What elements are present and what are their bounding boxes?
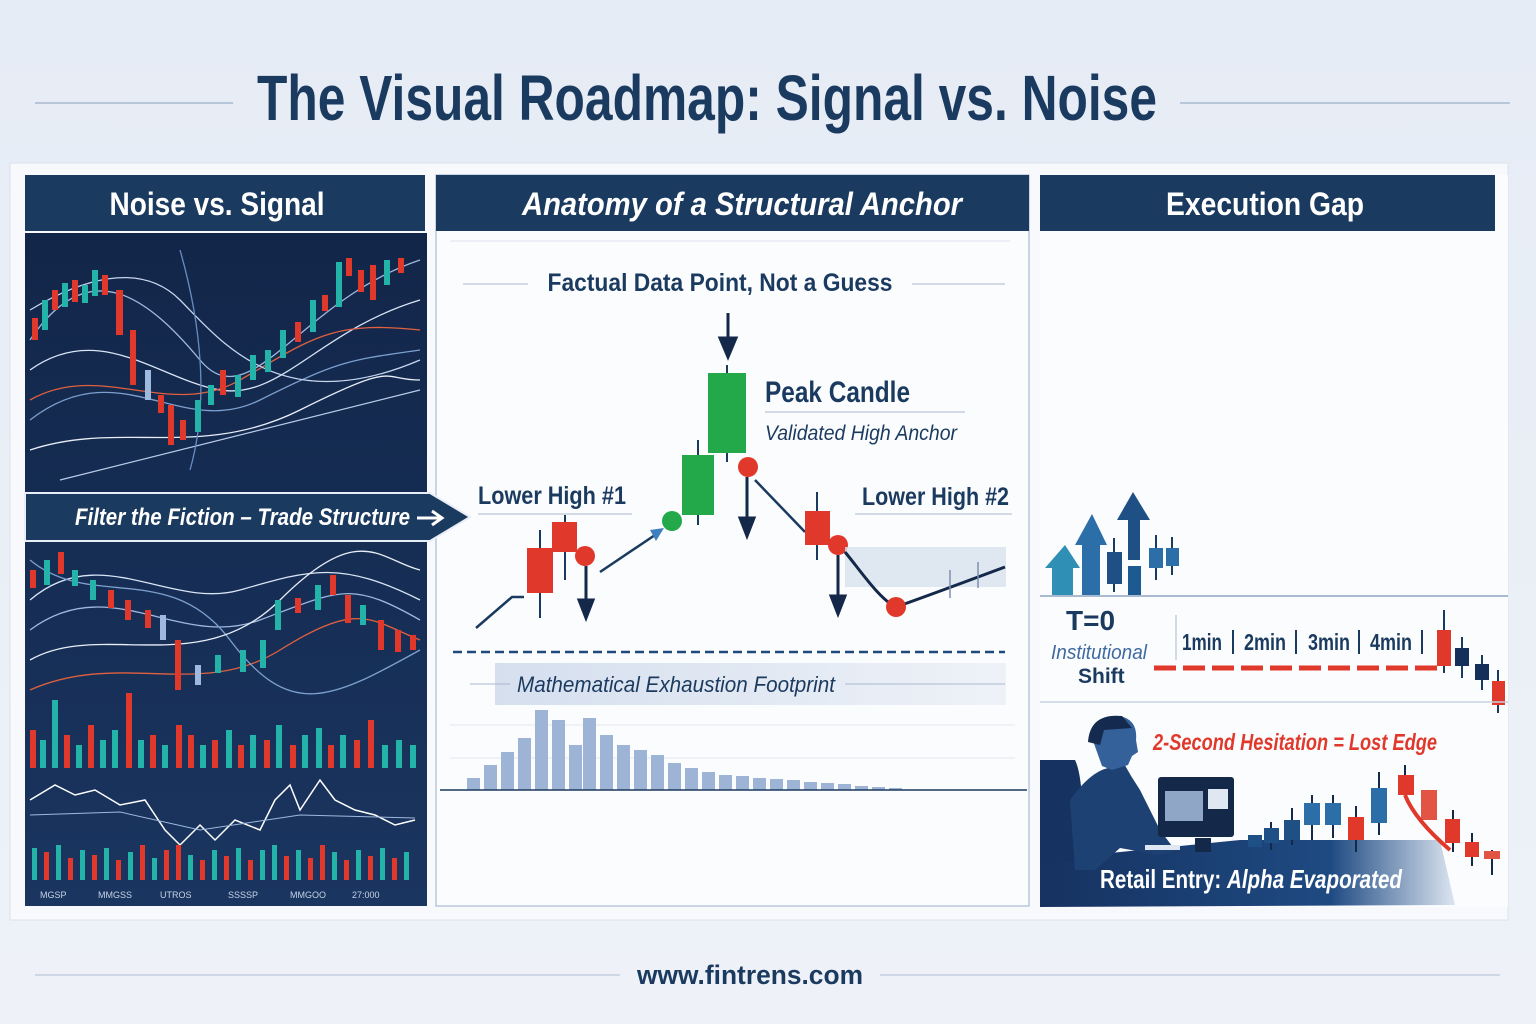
label: T=0 institutional shift xyxy=(1051,605,1148,688)
trend line xyxy=(476,535,655,628)
panel: anatomy of structural anchor xyxy=(436,175,1029,906)
header: noise vs signal xyxy=(25,175,425,231)
timeline minutes: 2min xyxy=(1244,629,1286,655)
arrow: down to peak xyxy=(720,313,736,357)
candles: lower high 2 xyxy=(805,492,848,614)
header: anatomy xyxy=(436,175,1029,231)
label: lower high 2: Lower High #2 xyxy=(862,483,1009,511)
histogram xyxy=(467,710,902,790)
header: execution gap: Execution Gap xyxy=(1166,186,1364,222)
axis labels: MMGOO xyxy=(290,890,326,900)
candles: lower high 1 xyxy=(527,515,595,618)
title: The Visual Roadmap: Signal vs. Noise xyxy=(257,62,1157,134)
timeline minutes: 1min xyxy=(1182,629,1222,655)
header: noise vs signal: Noise vs. Signal xyxy=(110,186,324,222)
chart: volume bars xyxy=(30,693,416,768)
label: T=0 institutional shift: T=0 xyxy=(1066,605,1115,636)
timeline minutes: 4min xyxy=(1370,629,1412,655)
label: hesitation: 2-Second Hesitation = Lost Edge xyxy=(1152,729,1437,755)
timeline minutes: 3min xyxy=(1308,629,1350,655)
chart: noisy bottom xyxy=(30,551,420,694)
label: peak candle: Validated High Anchor xyxy=(765,422,958,445)
illustration: trader at desk xyxy=(1040,716,1455,907)
axis labels xyxy=(40,890,380,900)
label: lower high 1: Lower High #1 xyxy=(478,482,626,510)
band: exhaustion footprint xyxy=(470,663,1006,705)
label: T=0 institutional shift: Shift xyxy=(1078,665,1125,688)
footer: www.fintrens.com xyxy=(636,960,863,990)
header: anatomy: Anatomy of a Structural Anchor xyxy=(521,186,963,222)
panel: noise vs signal xyxy=(25,175,427,906)
timeline minutes xyxy=(1182,629,1422,655)
axis labels: SSSSP xyxy=(228,890,258,900)
icon: rising arrows xyxy=(1045,492,1179,595)
banner: filter the fiction: Filter the Fiction – Trade Structure xyxy=(75,504,410,531)
chart: noisy top xyxy=(30,250,420,480)
label: retail entry: Retail Entry: Alpha Evaporated xyxy=(1100,864,1403,894)
candles: retail xyxy=(1248,765,1500,875)
subtitle: factual data point: Factual Data Point, Not a Guess xyxy=(548,269,892,297)
candle: peak xyxy=(682,365,746,525)
label: T=0 institutional shift: Institutional xyxy=(1051,642,1148,664)
axis labels: 27:000 xyxy=(352,890,380,900)
panel: execution gap xyxy=(1040,175,1508,907)
chart: oscillator line xyxy=(30,780,415,845)
banner: filter the fiction xyxy=(25,493,470,541)
main card xyxy=(10,163,1508,920)
candles: drop xyxy=(1437,610,1505,713)
axis labels: MMGSS xyxy=(98,890,132,900)
arrow: down from peak xyxy=(740,477,754,536)
axis labels: MGSP xyxy=(40,890,67,900)
axis labels: UTROS xyxy=(160,890,192,900)
header: execution gap xyxy=(1040,175,1495,231)
red dashed delay line xyxy=(1154,666,1437,670)
label: peak candle: Peak Candle xyxy=(765,376,910,409)
chart: lower volume xyxy=(32,845,409,880)
band: exhaustion footprint: Mathematical Exhaustion Footprint xyxy=(517,672,836,697)
label: peak candle xyxy=(765,376,965,445)
